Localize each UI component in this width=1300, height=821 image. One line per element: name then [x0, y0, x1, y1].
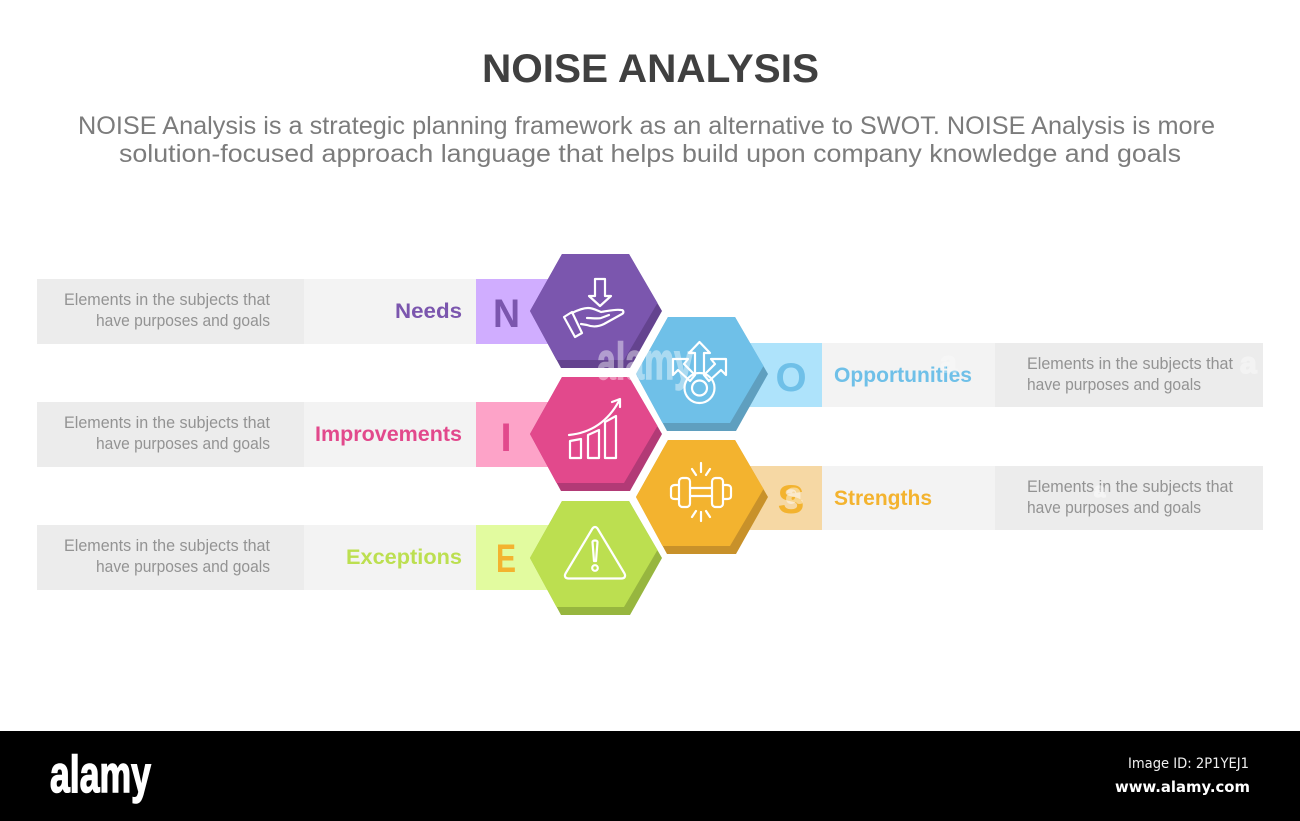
- hexagon: needs: [530, 254, 662, 368]
- hexagon: exceptions: [530, 501, 662, 615]
- watermark: a: [1240, 347, 1257, 380]
- band: opportunities: Opportunities: [834, 364, 972, 387]
- band: improvements: Elements in the subjects that: [64, 413, 270, 432]
- band: strengths: Elements in the subjects that: [1027, 477, 1233, 496]
- band: needs: Elements in the subjects that: [64, 290, 270, 309]
- band: strengths: Strengths: [834, 487, 932, 510]
- band: strengths: [740, 466, 1263, 530]
- band: exceptions: have purposes and goals: [96, 557, 270, 576]
- band: opportunities: [740, 343, 1263, 407]
- subtitle text: solution-focused approach language that helps build upon company knowledge and goals: [119, 140, 1181, 168]
- watermark: [597, 333, 1257, 509]
- band: needs: Needs: [395, 300, 462, 323]
- band: exceptions: [37, 525, 556, 590]
- band: strengths: S: [778, 478, 804, 522]
- footer bar: [0, 731, 1300, 821]
- band: strengths: have purposes and goals: [1027, 498, 1201, 517]
- title: NOISE ANALYSIS: [482, 47, 819, 91]
- website: www.alamy.com: [1115, 778, 1250, 796]
- band: exceptions: Elements in the subjects that: [64, 536, 270, 555]
- hexagon: strengths: [636, 440, 768, 554]
- hexagon: improvements: [530, 377, 662, 491]
- band: opportunities: O: [775, 356, 807, 400]
- band: opportunities: Elements in the subjects that: [1027, 354, 1233, 373]
- icon: branching arrows: [673, 342, 726, 403]
- watermark: a: [786, 478, 802, 509]
- band: opportunities: have purposes and goals: [1027, 375, 1201, 394]
- band: improvements: I: [500, 416, 512, 460]
- band: exceptions: Exceptions: [346, 546, 462, 569]
- band: improvements: [37, 402, 556, 467]
- band: needs: [37, 279, 556, 344]
- icon: dumbbell: [671, 463, 731, 521]
- footer logo: alamy: [50, 746, 151, 804]
- band: needs: N: [493, 292, 520, 336]
- band: improvements: Improvements: [315, 423, 462, 446]
- band: needs: have purposes and goals: [96, 311, 270, 330]
- hexagon: opportunities: [636, 317, 768, 431]
- subtitle text: NOISE Analysis is a strategic planning framework as an alternative to SWOT. NOISE Analysis is more: [78, 112, 1215, 140]
- watermark: alamy: [597, 333, 693, 391]
- icon: warning triangle: [565, 527, 625, 578]
- band: exceptions: E: [496, 537, 516, 581]
- image id: Image ID: 2P1YEJ1: [1128, 756, 1249, 772]
- band: improvements: have purposes and goals: [96, 434, 270, 453]
- watermark: a: [1094, 480, 1106, 502]
- watermark: a: [940, 346, 957, 379]
- subtitle text: [78, 112, 1215, 168]
- icon: growth chart: [569, 399, 620, 458]
- icon: hand receiving arrow: [564, 279, 623, 337]
